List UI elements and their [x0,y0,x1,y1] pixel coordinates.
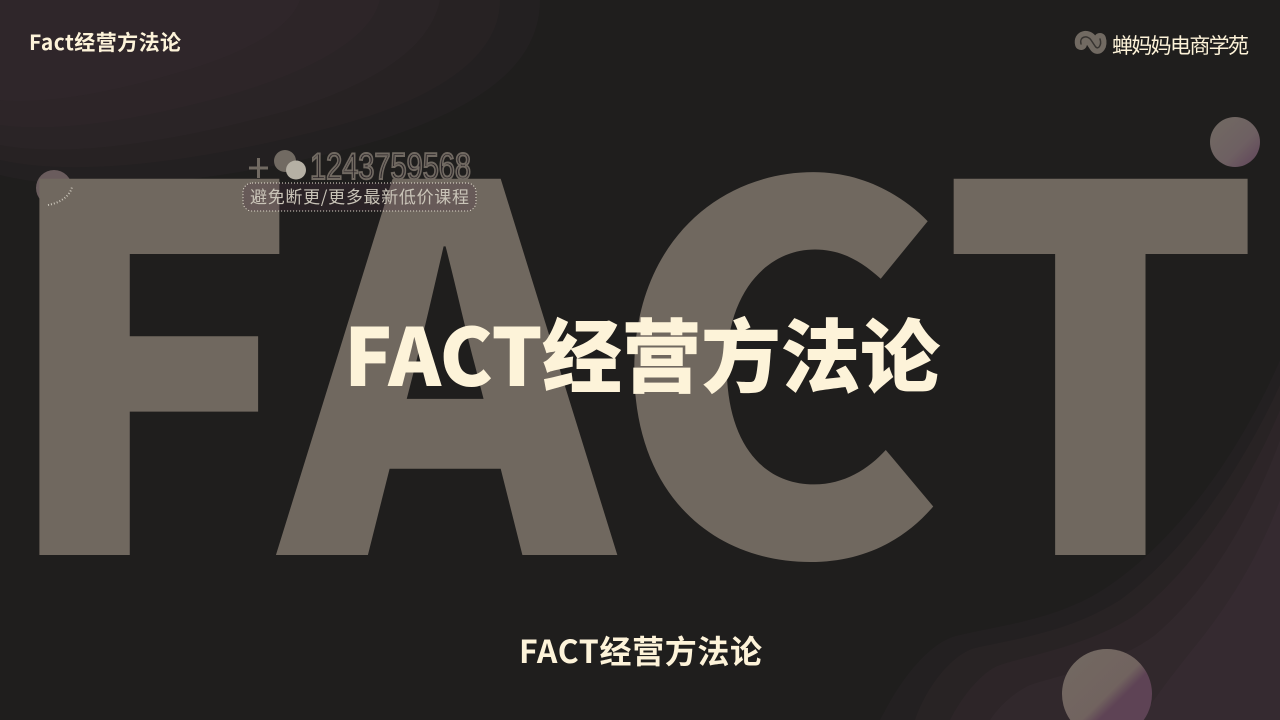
decorative ball: bottom [1062,649,1152,720]
logo: brand mark and name [1081,30,1249,60]
crescent on left ball [48,187,72,205]
pill label: 避免断更/更多最新低价课程 [250,183,469,208]
decorative ball: top right [1210,117,1260,167]
heading: top left course name: Fact经营方法论 [29,27,181,57]
icon: brand mark [1081,37,1101,48]
brand name: 蝉妈妈电商学苑 [1112,30,1249,60]
watermark: contact [243,146,476,211]
purple haze: top left [0,0,540,185]
decorative ball: left [36,170,72,206]
number: 1243759568 [310,146,471,187]
icon: plus [249,158,268,178]
icon: wechat [274,150,306,180]
main title: FACT经营方法论 [344,294,941,410]
purple haze: bottom right [880,360,1280,720]
subtitle caption: FACT经营方法论 [519,627,762,673]
